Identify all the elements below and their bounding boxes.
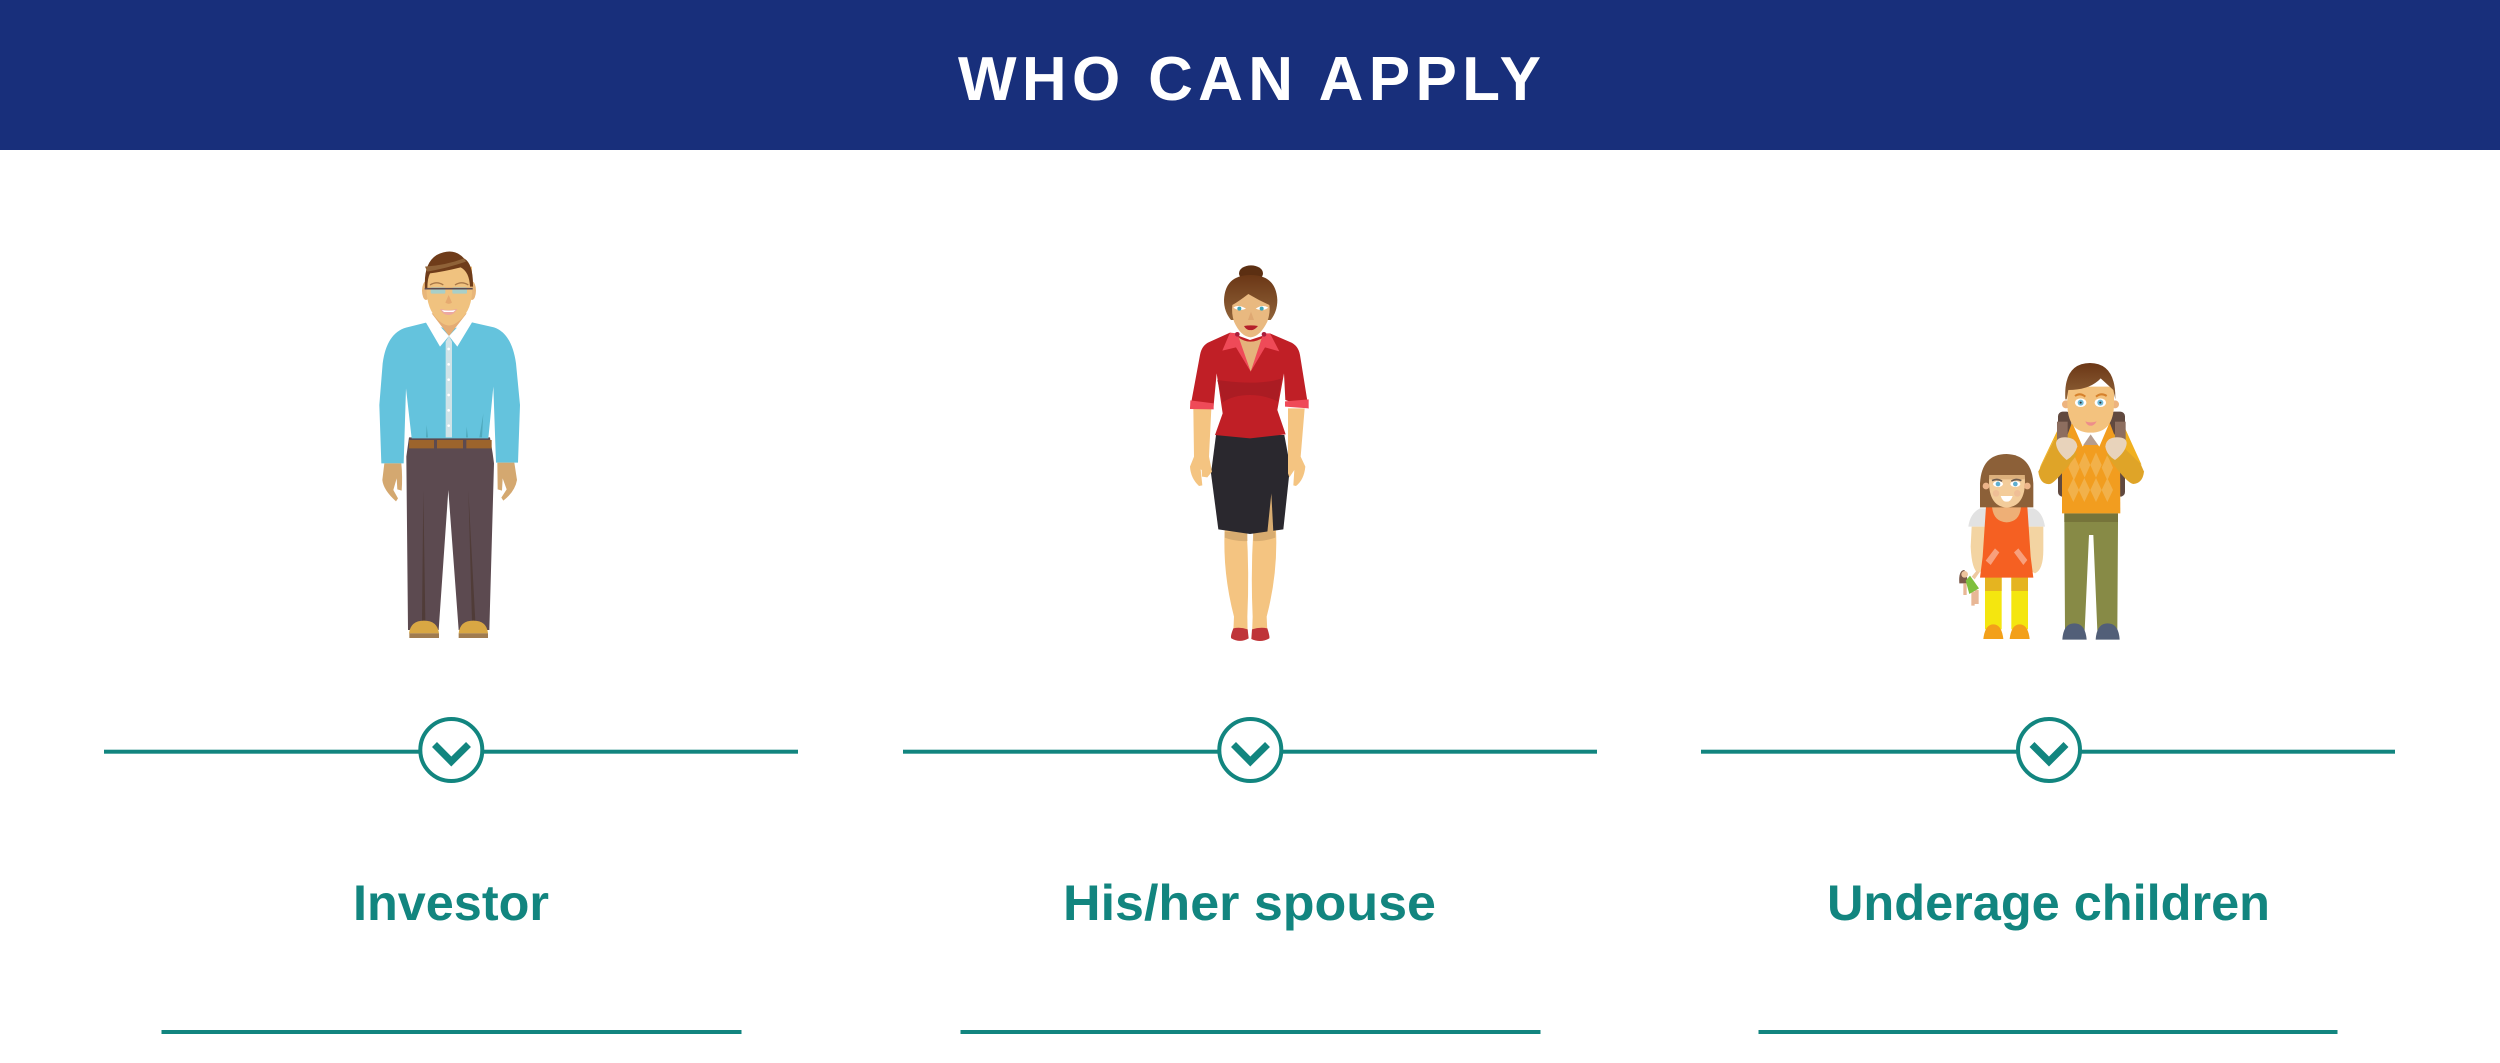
girl <box>1959 454 2045 639</box>
doll <box>1959 570 1979 606</box>
label: Underage children <box>1827 875 2270 931</box>
header banner <box>0 0 2500 150</box>
panel: children <box>1701 363 2395 1034</box>
title: WHO CAN APPLY <box>958 45 1541 114</box>
icon: man in blue shirt <box>379 252 520 638</box>
panel: spouse <box>903 265 1597 1034</box>
boy <box>2038 363 2144 640</box>
label: His/her spouse <box>1063 875 1436 931</box>
label: Investor <box>353 875 549 931</box>
panel: investor <box>104 252 798 1034</box>
connector line with chevron badge <box>104 719 798 781</box>
icon: girl and boy <box>1959 363 2144 640</box>
icon: woman in red blouse <box>1190 265 1309 641</box>
connector line with chevron badge <box>903 719 1597 781</box>
connector line with chevron badge <box>1701 719 2395 781</box>
